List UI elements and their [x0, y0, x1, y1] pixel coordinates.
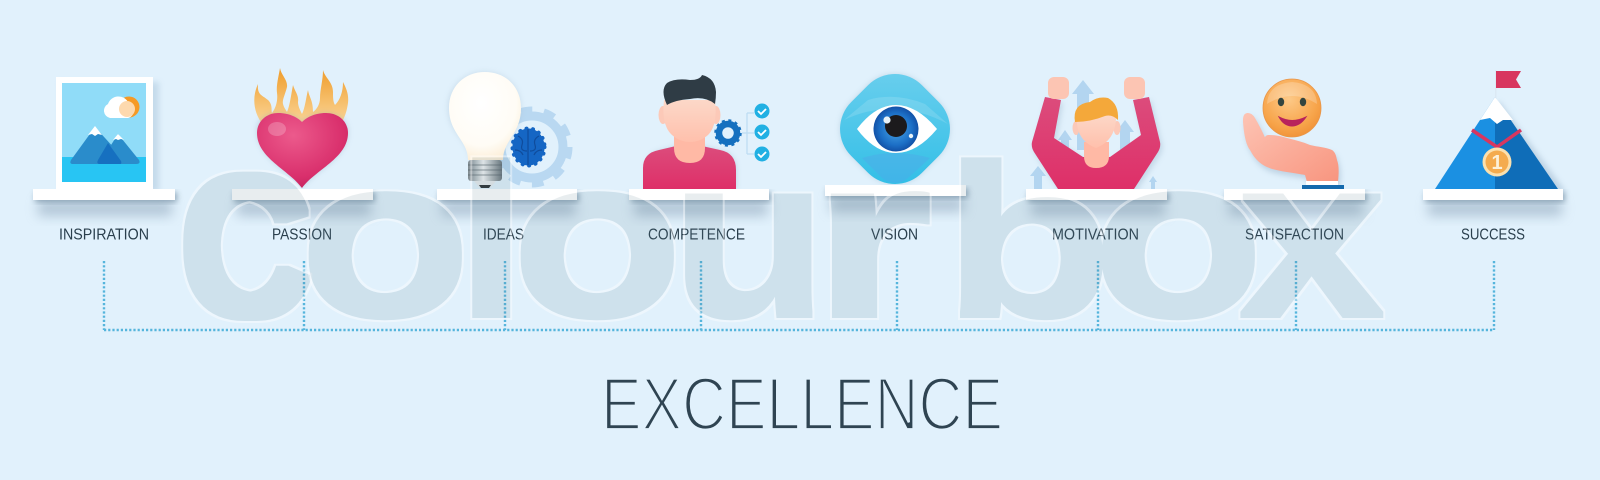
icon: person with raised arms [1032, 77, 1162, 192]
watermark: r [811, 112, 933, 363]
shelf [232, 189, 375, 216]
icon: mountain with flag and medal: 1 [1491, 152, 1503, 174]
label: PASSION [272, 226, 332, 244]
watermark: C [182, 134, 309, 360]
icon: mountain with flag and medal [1435, 70, 1566, 192]
panel: motivation [1026, 77, 1169, 244]
label: VISION [871, 226, 918, 244]
panel: success [1423, 70, 1566, 244]
icon: light bulb [448, 72, 521, 188]
icon: rising arrows [1030, 80, 1157, 189]
icon: gear [495, 110, 569, 184]
watermark: u [670, 112, 829, 363]
watermark: l [455, 122, 528, 361]
icon: person [643, 75, 736, 189]
panel: competence [629, 75, 771, 244]
label: IDEAS [483, 226, 524, 244]
watermark: x [1239, 112, 1384, 363]
panel: inspiration [33, 77, 177, 244]
shelf [1423, 189, 1565, 216]
icon: hand holding smiley [1243, 79, 1344, 189]
shelf [437, 189, 579, 216]
icon: flaming heart [254, 68, 348, 188]
label: SUCCESS [1461, 226, 1525, 244]
icon: brain [512, 128, 544, 166]
title: EXCELLENCE [601, 363, 1003, 446]
watermark: b [943, 122, 1113, 360]
label: COMPETENCE [648, 226, 745, 244]
label: SATISFACTION [1245, 226, 1344, 244]
watermark [182, 112, 1384, 363]
watermark: o [299, 112, 472, 363]
icon: framed picture [56, 77, 159, 192]
label: INSPIRATION [59, 226, 149, 244]
panel: vision [824, 58, 968, 244]
icon: gear and checklist [716, 104, 770, 162]
shelf [33, 189, 177, 216]
panel: satisfaction [1224, 79, 1367, 244]
shelf [629, 189, 771, 216]
dotted connector lines [104, 261, 1494, 330]
shelf [1026, 189, 1169, 216]
icon: eye badge [824, 58, 966, 200]
watermark: o [511, 112, 684, 363]
panel: ideas [437, 72, 579, 244]
watermark: o [1092, 112, 1265, 363]
shelf [825, 185, 968, 212]
panel: passion [232, 68, 375, 244]
shelf [1224, 189, 1367, 216]
label: MOTIVATION [1052, 226, 1139, 244]
